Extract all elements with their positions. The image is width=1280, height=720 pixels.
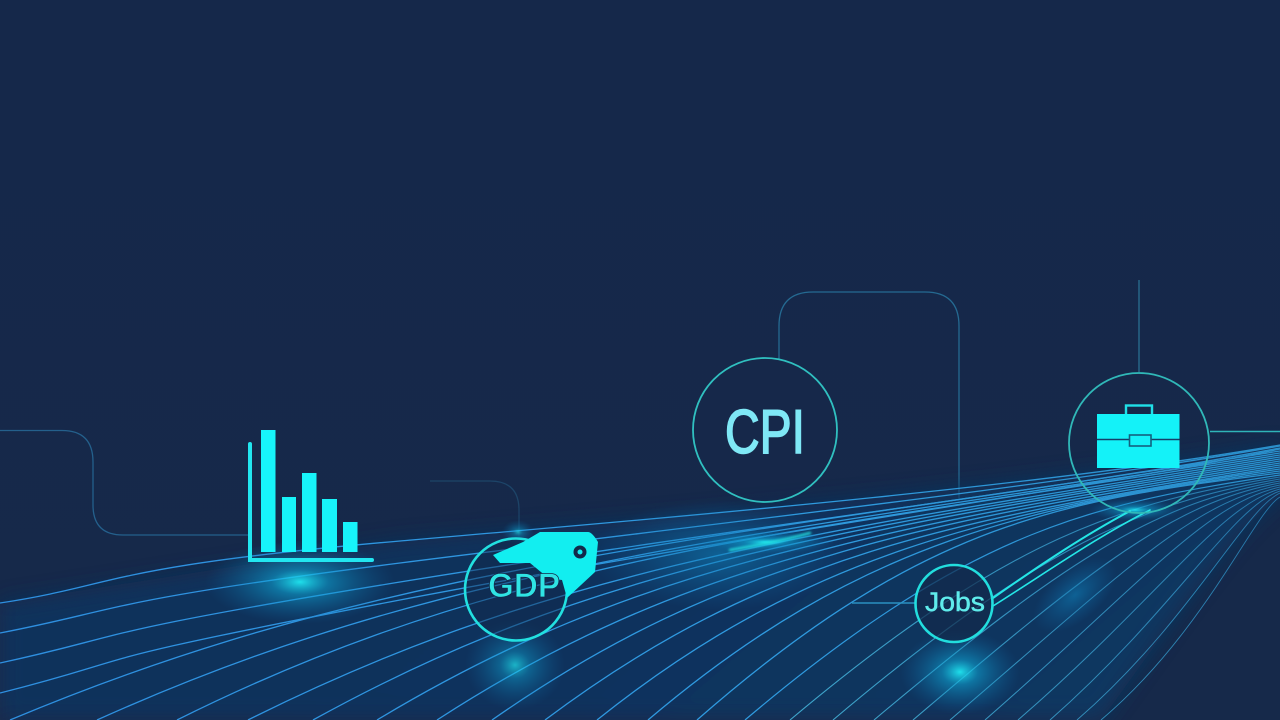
connector line: CPI bracket [779,292,959,498]
connector line: briefcase top [1138,280,1140,372]
GDP label: GDP [488,567,560,605]
chart bars [261,430,358,552]
Jobs label: Jobs [925,587,985,617]
glow spots [205,499,1181,714]
connector line: left bracket [0,430,250,535]
price tag [493,532,598,598]
highlight streaks [730,510,1150,606]
icon: GDP badge with price tag [465,532,598,640]
icon: bar chart [250,430,372,560]
CPI label: CPI [725,398,805,467]
wave ground surface [0,445,1280,720]
briefcase [1097,406,1180,468]
connector line: GDP bracket [430,481,519,540]
icon: CPI badge [693,358,837,502]
wave line field [0,445,1280,720]
chart axes [250,444,372,560]
icon: Jobs badge [852,565,992,642]
icon: briefcase badge [1069,373,1280,513]
